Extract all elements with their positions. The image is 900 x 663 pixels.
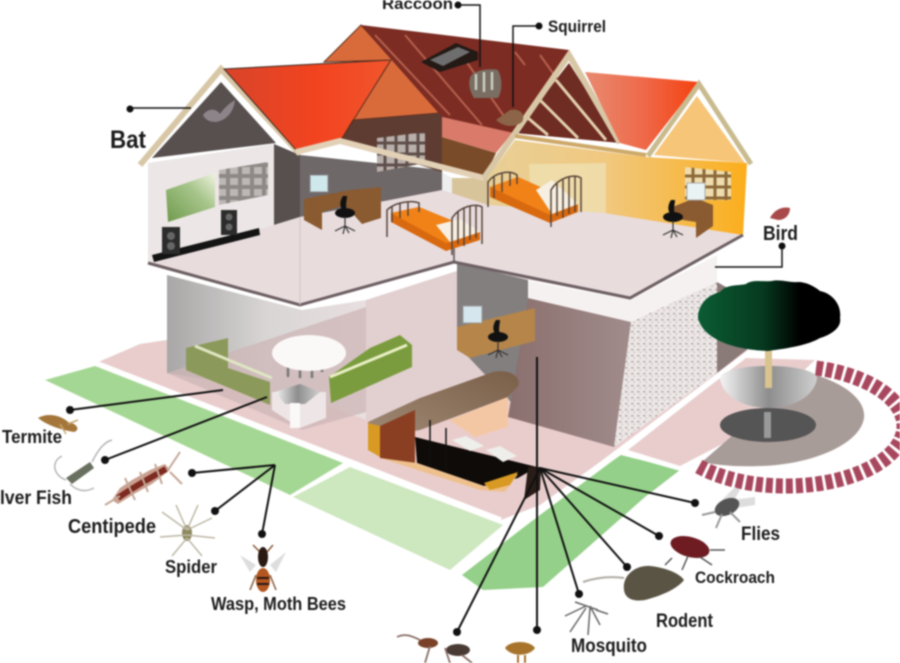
roof rafters [375, 35, 565, 125]
trunk [765, 350, 772, 388]
icon: bat [203, 100, 235, 122]
lawn: left strip [45, 366, 343, 495]
callout: wasp: Wasp, Moth Bees [211, 594, 346, 614]
desk: right room [663, 183, 713, 238]
callout: rodent: Rodent [656, 611, 714, 632]
left gable wall [152, 82, 276, 158]
callout: centipede [68, 452, 275, 538]
middle brown roof underside [361, 25, 569, 133]
icon: raccoon [469, 69, 501, 98]
callout: silver fish [0, 397, 267, 509]
callout: bat [110, 106, 191, 154]
icon: bird [770, 207, 790, 220]
callout: bat: Bat [110, 126, 147, 154]
callout: raccoon [382, 0, 480, 67]
left room dark wall [274, 144, 300, 225]
soundbar and speakers [152, 210, 260, 262]
callout: bird [715, 223, 798, 267]
door opening [529, 163, 606, 220]
upper bowl [720, 366, 817, 408]
callout: bird: Bird [763, 223, 798, 245]
callout: mosquito [540, 468, 647, 657]
patio brick ring [698, 368, 900, 486]
coffee pedestal [272, 384, 326, 428]
TV [166, 173, 215, 222]
callout: termite: Termite [2, 427, 62, 447]
ground floor desk [457, 306, 535, 358]
garden pink path [628, 358, 815, 466]
middle orange gable [324, 25, 440, 140]
right room yellow wall [488, 140, 747, 236]
callout: wasp [211, 465, 346, 614]
main beam [296, 141, 484, 178]
white path strip [96, 363, 501, 520]
callout: squirrel: Squirrel [548, 17, 606, 36]
upper floor slab [148, 190, 743, 305]
brown gable wall [341, 113, 442, 172]
wall window: right room [685, 167, 731, 200]
callout: ant [397, 468, 540, 663]
slab edge [148, 235, 743, 305]
callout: flies [540, 468, 780, 545]
callout: spider: Spider [165, 557, 217, 577]
ground floor walls [167, 255, 749, 447]
right gable trim [648, 84, 751, 164]
callout: mosquito: Mosquito [571, 636, 647, 657]
desk: left room [304, 175, 381, 234]
dining table [272, 335, 346, 378]
callout: silver fish: lver Fish [0, 488, 72, 509]
lawn: centre strip [293, 467, 503, 570]
sofa: right [329, 335, 412, 403]
left red roof [224, 60, 391, 150]
right gable wall [654, 96, 745, 163]
object on roof [421, 43, 478, 72]
bed: back [488, 172, 581, 227]
callout: termite [2, 390, 223, 447]
right red roof [585, 72, 699, 150]
callout: squirrel [513, 17, 606, 107]
callout: centipede: Centipede [68, 516, 156, 538]
callout: cockroach [540, 468, 775, 587]
upper storey: back walls [300, 113, 513, 217]
crown [698, 280, 840, 351]
lawn: right strip [462, 455, 680, 590]
callout: rodent [540, 468, 714, 632]
back window [377, 132, 425, 172]
left gable trim [140, 69, 300, 165]
sofa: left [186, 338, 272, 405]
white right strip [459, 357, 744, 573]
lower basin [720, 408, 816, 442]
callout: cockroach: Cockroach [695, 568, 775, 587]
left room white wall [148, 144, 274, 263]
callout: flea [505, 357, 541, 663]
bed: centre [387, 202, 482, 255]
ground plate [96, 290, 748, 520]
basement pit [368, 371, 541, 500]
patio [698, 368, 900, 486]
callout: spider [160, 465, 275, 577]
centre gable trim [484, 55, 620, 178]
right underside [515, 63, 620, 143]
perforated block wall [614, 282, 717, 447]
callout: flies: Flies [741, 524, 780, 545]
wall window: left room [219, 162, 268, 205]
right rafters [528, 80, 606, 140]
icon: squirrel [496, 110, 523, 126]
fountain and tree [698, 280, 840, 442]
